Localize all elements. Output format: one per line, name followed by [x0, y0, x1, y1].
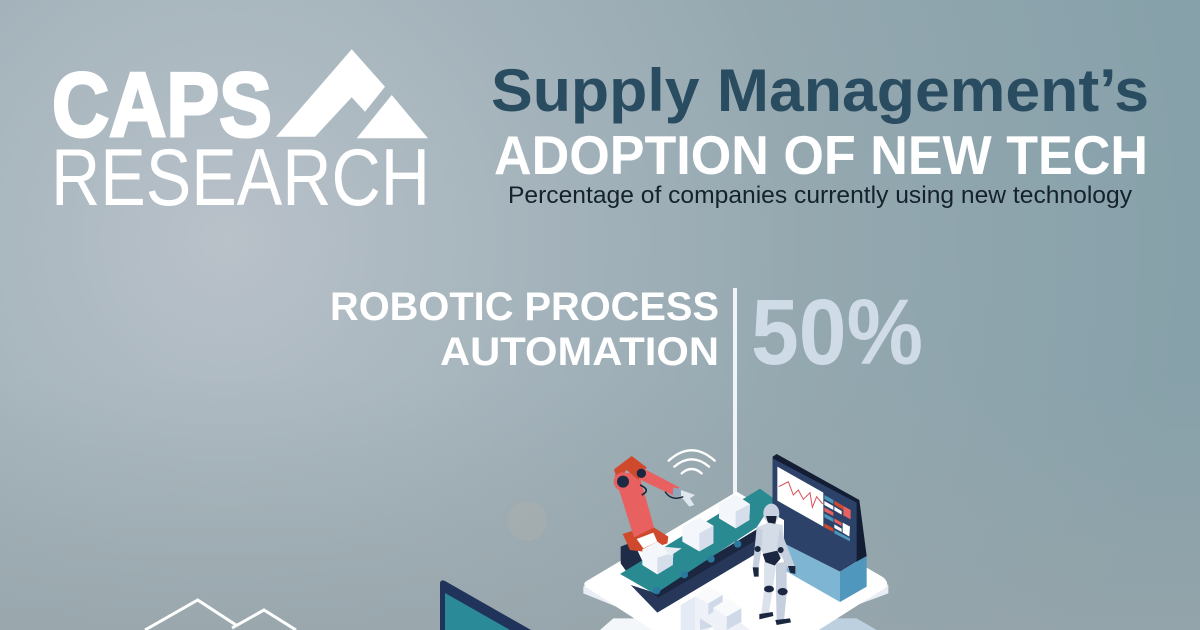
icon: outlined mountains [145, 600, 296, 630]
callout label [330, 285, 719, 374]
callout label: ROBOTIC PROCESS [330, 285, 719, 329]
callout value: 50% [751, 280, 923, 384]
laptop [440, 580, 531, 630]
subtitle: Percentage of companies currently using new technology [508, 182, 1132, 209]
monitor [773, 454, 867, 602]
logo wordmark: RESEARCH: RESEARCH [51, 133, 430, 223]
callout: robotic process automation 50% [330, 280, 923, 496]
dashboard tiles [824, 495, 851, 541]
platform [583, 493, 888, 630]
stacked boxes [681, 587, 750, 630]
logo icon: mountains [276, 49, 428, 138]
callout label: AUTOMATION [440, 330, 719, 374]
icon: wifi signal [669, 450, 715, 473]
title [491, 57, 1149, 209]
logo wordmark: CAPS: CAPS [52, 55, 272, 156]
boxes on belt [682, 495, 750, 551]
conveyor belt [620, 489, 775, 613]
title line: Supply Management's: Supply Management’s [491, 57, 1149, 124]
icon: humanoid robot [753, 504, 795, 625]
logo: CAPS Research [51, 49, 430, 223]
callout leader line [733, 288, 737, 496]
open box [637, 533, 682, 574]
lower platform [600, 618, 877, 630]
illustration: robot factory platform [583, 450, 888, 630]
icon: robot arm [614, 456, 695, 552]
title line: Adoption of new tech: ADOPTION OF NEW TECH [494, 124, 1148, 186]
